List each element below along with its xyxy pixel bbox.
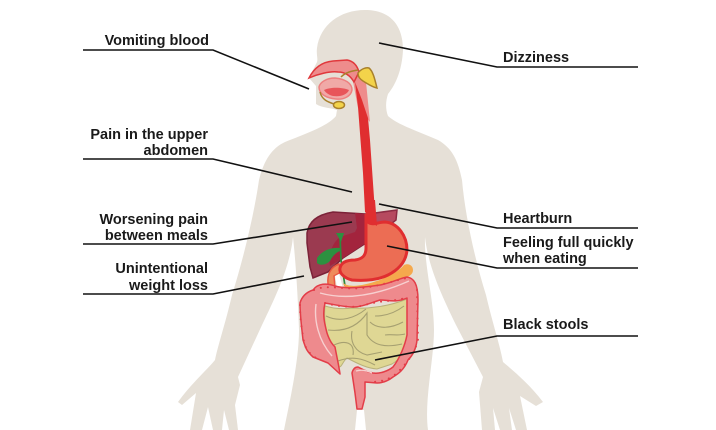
label: feeling full quickly when eating: Feeling full quickly [503, 235, 634, 251]
label: vomiting blood: Vomiting blood [105, 33, 209, 49]
organ: stomach [340, 200, 407, 280]
leader line: heartburn [379, 204, 638, 228]
leader line: vomiting blood [83, 50, 309, 89]
label: heartburn: Heartburn [503, 211, 572, 227]
leader line: black stools [375, 336, 638, 360]
organ: salivary glands [320, 68, 377, 108]
label: worsening pain between meals: between meals [105, 228, 208, 244]
label: unintentional weight loss: Unintentional [115, 261, 208, 277]
label: feeling full quickly when eating: when eating [502, 251, 587, 267]
label: dizziness: Dizziness [503, 50, 569, 66]
organ: mouth and throat [309, 60, 375, 212]
label: worsening pain between meals: Worsening pain [100, 212, 208, 228]
leader line: unintentional weight loss [83, 276, 304, 294]
label: pain in the upper abdomen: Pain in the upper [90, 127, 208, 143]
label: pain in the upper abdomen: abdomen [144, 143, 208, 159]
leader line: worsening pain [83, 222, 352, 244]
body silhouette [178, 10, 543, 430]
organ: liver [307, 210, 397, 278]
organ: gallbladder and bile duct [317, 233, 345, 286]
leader line: feeling full [387, 246, 638, 268]
leader line: dizziness [379, 43, 638, 67]
leader line: pain in upper abdomen [83, 159, 352, 192]
label: unintentional weight loss: weight loss [128, 278, 208, 294]
organ: large intestine [300, 277, 418, 409]
organ: duodenum [328, 264, 343, 288]
organ: small intestine [325, 299, 408, 369]
organ: pancreas [343, 264, 413, 291]
label: black stools: Black stools [503, 317, 588, 333]
